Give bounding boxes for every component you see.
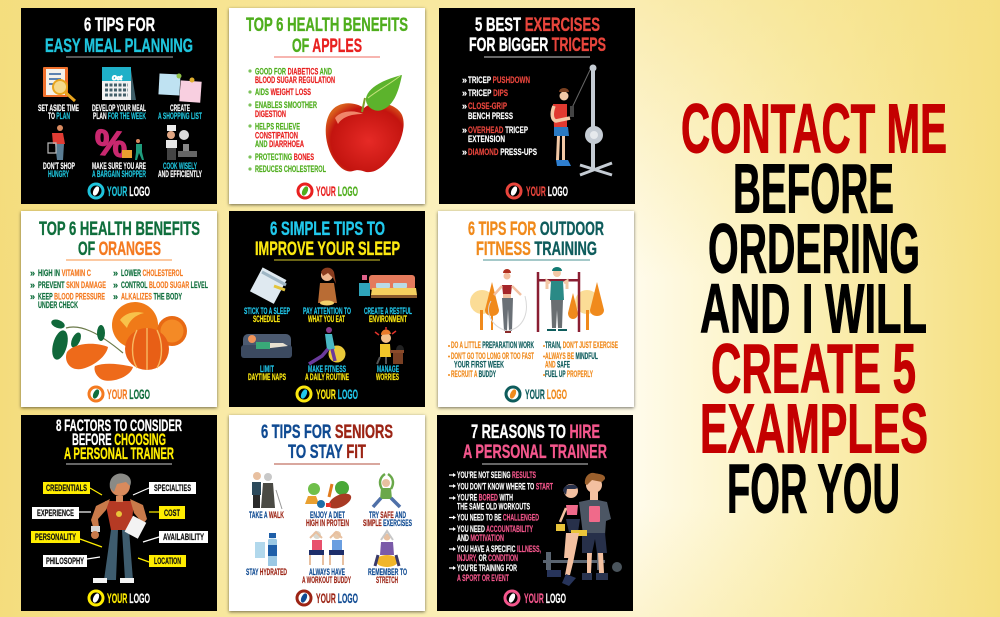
exercise list: » <box>462 125 467 135</box>
tips list: RECRUIT A BUDDY <box>451 369 496 379</box>
label: pay attention: WHAT YOU EAT <box>308 314 345 324</box>
call to action text <box>681 90 947 528</box>
label: develop meal plan <box>92 103 146 121</box>
label: specialties <box>133 482 196 495</box>
label: availability: AVAILABILITY <box>163 532 204 542</box>
illustration: trees <box>470 282 604 330</box>
label: stick to a sleep schedule: STICK TO A SLEEP <box>244 306 290 316</box>
reasons list: THE SAME OLD WORKOUTS <box>457 502 530 512</box>
label: take a walk: TAKE A WALK <box>249 510 284 520</box>
reasons list: YOU'RE BORED WITH <box>457 492 513 502</box>
heading: factors: 8 FACTORS TO CONSIDER <box>56 417 182 435</box>
panel: 6 simple tips to improve your sleep <box>229 211 425 407</box>
logo <box>89 387 150 402</box>
label: restful environment <box>364 306 412 324</box>
logo <box>89 591 150 606</box>
logo <box>507 184 568 199</box>
label: cook wisely: AND EFFICIENTLY <box>158 169 202 179</box>
icon: cable machine with man <box>552 64 612 175</box>
logo: YOUR LOGO <box>316 591 358 606</box>
exercise list: TRICEP DIPS <box>468 88 508 98</box>
exercise list: OVERHEAD TRICEP <box>468 125 528 135</box>
benefits list: » <box>30 292 35 302</box>
label: shopping list <box>158 103 202 121</box>
icon: senior couple walking <box>252 472 282 509</box>
logo: YOUR LOGO <box>526 184 568 199</box>
benefits list: » <box>113 268 118 278</box>
label: set aside time <box>38 103 79 121</box>
label: don't shop hungry <box>43 161 75 179</box>
label: limit daytime naps <box>248 364 286 382</box>
tips list: YOUR FIRST WEEK <box>454 360 504 370</box>
panel: top 6 health benefits of oranges <box>21 211 217 407</box>
benefits list: ALKALIZES THE BODY <box>121 292 182 302</box>
label: restful environment: ENVIRONMENT <box>369 314 407 324</box>
tips list: AND SAFE <box>545 360 570 370</box>
reasons list <box>449 470 553 583</box>
label: manage worries: MANAGE <box>377 364 399 374</box>
heading: apples: OF APPLES <box>292 35 362 57</box>
icon: water and bottle <box>255 533 277 566</box>
label: stay hydrated: STAY HYDRATED <box>246 567 287 577</box>
logo <box>297 387 358 402</box>
heading: easy meal planning: 6 TIPS FOR <box>84 14 155 36</box>
label: don't shop hungry: DON'T SHOP <box>43 161 75 171</box>
label: make fitness routine <box>305 364 349 382</box>
benefits list: HELPS RELIEVE <box>255 122 300 132</box>
exercise list: BENCH PRESS <box>468 111 513 121</box>
icon: oranges and leaves <box>49 302 187 381</box>
icon: napping on sofa <box>241 334 292 358</box>
label: remember to stretch: STRETCH <box>376 575 398 585</box>
label: enjoy a diet: ENJOY A DIET <box>310 510 345 520</box>
label: develop meal plan: PLAN FOR THE WEEK <box>93 111 146 121</box>
tips list: TRAIN, DON'T JUST EXERCISE <box>545 340 618 350</box>
benefits list: LOWER CHOLESTEROL <box>121 268 183 278</box>
exercise list: TRICEP PUSHDOWN <box>468 75 530 85</box>
label: restful environment: CREATE A RESTFUL <box>364 306 412 316</box>
label: develop meal plan: DEVELOP YOUR MEAL <box>92 103 146 113</box>
label: safe exercises <box>363 510 412 528</box>
panel: top 6 health benefits of apples <box>229 8 425 204</box>
benefits list: CONTROL BLOOD SUGAR LEVEL <box>121 280 208 290</box>
label: location: LOCATION <box>154 556 181 566</box>
logo <box>298 184 358 199</box>
tips list: DO A LITTLE PREPARATION WORK <box>451 340 534 350</box>
heading: reasons: 7 REASONS TO HIRE <box>471 421 600 443</box>
heading: reasons <box>463 421 607 463</box>
logo <box>297 591 358 606</box>
label: bargain shopper: MAKE SURE YOU ARE <box>92 161 146 171</box>
heading: triceps <box>469 14 606 56</box>
label: credentials <box>43 482 102 495</box>
reasons list: INJURY, OR CONDITION <box>457 553 518 563</box>
panel: 8 factors to consider <box>21 415 217 611</box>
tips list <box>448 340 618 379</box>
icon: stretching on ball <box>375 531 399 567</box>
label: don't shop hungry: HUNGRY <box>48 169 69 179</box>
icon: tilted calendar <box>250 267 286 304</box>
label: philosophy: PHILOSOPHY <box>46 556 84 566</box>
logo: YOUR LOGO <box>525 387 567 402</box>
reasons list: YOU'RE TRAINING FOR <box>457 563 517 573</box>
label: set aside time: TO PLAN <box>48 111 70 121</box>
benefits list: PREVENT SKIN DAMAGE <box>38 280 106 290</box>
logo <box>505 591 566 606</box>
logo <box>89 184 150 199</box>
tips list: DON'T GO TOO LONG OR TOO FAST <box>451 351 534 361</box>
label: limit daytime naps: LIMIT <box>260 364 274 374</box>
icon: apple <box>326 75 404 172</box>
heading: factors: A PERSONAL TRAINER <box>64 445 174 463</box>
logo: YOUR LOGO <box>107 387 150 402</box>
heading: sleep <box>255 218 400 260</box>
heading: oranges <box>39 218 200 260</box>
exercise list: » <box>462 88 467 98</box>
panel: 6 tips for easy meal planning <box>21 8 217 204</box>
panel: 7 reasons to hire a personal trainer <box>437 415 633 611</box>
icon: woman with fitness ball <box>309 327 346 364</box>
reasons list: A SPORT OR EVENT <box>457 573 509 583</box>
reasons list: YOU'RE NOT SEEING RESULTS <box>457 470 536 480</box>
exercise list: » <box>462 75 467 85</box>
heading: outdoor fitness: 6 TIPS FOR OUTDOOR <box>468 218 604 240</box>
label: cost: COST <box>164 508 180 518</box>
label: experience: EXPERIENCE <box>37 508 74 518</box>
panel: 6 tips for outdoor fitness training <box>438 211 634 407</box>
panel: 6 tips for seniors to stay fit <box>229 415 425 611</box>
benefits list: ENABLES SMOOTHER <box>255 100 317 110</box>
exercise list: » <box>462 147 467 157</box>
tips list: ALWAYS BE MINDFUL <box>545 351 598 361</box>
label: workout buddy: ALWAYS HAVE <box>309 567 345 577</box>
label: manage worries: WORRIES <box>376 372 399 382</box>
reasons list: YOU DON'T KNOW WHERE TO START <box>457 482 553 492</box>
heading: sleep: IMPROVE YOUR SLEEP <box>255 238 400 260</box>
icon: bed <box>359 275 417 298</box>
heading: factors: BEFORE CHOOSING <box>72 431 166 449</box>
label: enjoy a diet <box>306 510 349 528</box>
label: remember to stretch: REMEMBER TO <box>368 567 407 577</box>
heading: easy meal planning <box>45 14 193 57</box>
benefits list: UNDER CHECK <box>38 300 78 310</box>
tips list: FUEL UP PROPERLY <box>545 369 593 379</box>
logo <box>506 387 567 402</box>
heading: sleep: 6 SIMPLE TIPS TO <box>270 218 385 240</box>
label: enjoy a diet: HIGH IN PROTEIN <box>306 518 349 528</box>
exercise list: DIAMOND PRESS-UPS <box>468 147 537 157</box>
icon: sticky notes <box>158 73 202 103</box>
exercise list: EXTENSION <box>468 134 505 144</box>
icon: clipboard and magnifier <box>43 67 75 101</box>
heading: outdoor fitness: FITNESS TRAINING <box>476 238 597 260</box>
icon: worried man at desk <box>375 327 404 364</box>
label: manage worries <box>376 364 399 382</box>
label: cook wisely: COOK WISELY <box>163 161 197 171</box>
illustration: trainer <box>91 474 147 583</box>
heading: apples <box>246 14 408 57</box>
benefits list: DIGESTION <box>255 109 286 119</box>
benefits list: AND DIARRHOEA <box>255 139 304 149</box>
label: pay attention <box>303 306 351 324</box>
panel: 5 best exercises for bigger triceps <box>439 8 635 204</box>
benefits list: » <box>30 268 35 278</box>
icon: healthy food <box>305 481 353 512</box>
reasons list: AND MOTIVATION <box>457 533 504 543</box>
icon: percent and shopper <box>95 121 144 165</box>
label: workout buddy <box>302 567 351 585</box>
heading: seniors: 6 TIPS FOR SENIORS <box>261 421 393 443</box>
benefits list: KEEP BLOOD PRESSURE <box>38 292 105 302</box>
heading: factors <box>56 417 182 463</box>
heading: triceps: FOR BIGGER TRICEPS <box>469 34 606 56</box>
logo: YOUR LOGO <box>107 591 150 606</box>
label: specialties: SPECIALTIES <box>154 483 191 493</box>
icon: yoga senior <box>373 474 400 507</box>
exercise list <box>462 75 537 157</box>
benefits list: AIDS WEIGHT LOSS <box>255 87 311 97</box>
benefits list: CONSTIPATION <box>255 130 298 140</box>
label: cook wisely <box>158 161 202 179</box>
label: set aside time: SET ASIDE TIME <box>38 103 79 113</box>
icon: calendar: Oct <box>112 76 123 82</box>
heading: easy meal planning: EASY MEAL PLANNING <box>45 35 193 57</box>
illustration: man on pull-up bar <box>538 267 579 332</box>
logo: YOUR LOGO <box>316 184 358 199</box>
label: stick to a sleep schedule: SCHEDULE <box>253 314 280 324</box>
benefits list: » <box>113 292 118 302</box>
benefits list: BLOOD SUGAR REGULATION <box>255 75 335 85</box>
logo: YOUR LOGO <box>524 591 566 606</box>
icon: chef cooking <box>166 125 197 160</box>
icon: percent and shopper: % <box>95 121 127 165</box>
illustration: woman jumping rope <box>489 269 526 333</box>
heading: oranges: OF ORANGES <box>78 238 161 260</box>
benefits list: PROTECTING BONES <box>255 152 314 162</box>
icon: shopper <box>48 125 65 160</box>
heading: seniors: TO STAY FIT <box>288 441 366 463</box>
label: bargain shopper: A BARGAIN SHOPPER <box>92 169 146 179</box>
label: cost <box>149 506 185 519</box>
heading: reasons: A PERSONAL TRAINER <box>463 441 607 463</box>
label: stick to a sleep schedule <box>244 306 290 324</box>
benefits list <box>248 66 335 174</box>
logo: YOUR LOGO <box>316 387 358 402</box>
label: make fitness routine: MAKE FITNESS <box>308 364 346 374</box>
label: bargain shopper <box>92 161 146 179</box>
heading: seniors <box>261 421 393 463</box>
exercise list: » <box>462 101 467 111</box>
label: shopping list: A SHOPPING LIST <box>158 111 202 121</box>
label: location <box>138 555 186 567</box>
label: credentials: CREDENTIALS <box>46 483 87 493</box>
heading: apples: TOP 6 HEALTH BENEFITS <box>246 14 408 36</box>
benefits list: HIGH IN VITAMIN C <box>38 268 91 278</box>
benefits list: » <box>30 280 35 290</box>
icon: workout buddies <box>309 531 344 565</box>
icon: woman eating <box>318 268 337 306</box>
label: personality: PERSONALITY <box>35 532 76 542</box>
label: personality <box>31 531 102 547</box>
logo: YOUR LOGO <box>107 184 150 199</box>
icon: calendar <box>102 67 136 100</box>
label: workout buddy: A WORKOUT BUDDY <box>302 575 351 585</box>
label: make fitness routine: A DAILY ROUTINE <box>305 372 349 382</box>
benefits list: GOOD FOR DIABETICS AND <box>255 66 332 76</box>
reasons list: YOU HAVE A SPECIFIC ILLNESS, <box>457 544 541 554</box>
benefits list <box>30 268 208 310</box>
label: safe exercises: TRY SAFE AND <box>369 510 406 520</box>
illustration: personal trainer and client <box>543 473 622 586</box>
label: pay attention: PAY ATTENTION TO <box>303 306 351 316</box>
label: remember to stretch <box>368 567 407 585</box>
label: limit daytime naps: DAYTIME NAPS <box>248 372 286 382</box>
label: safe exercises: SIMPLE EXERCISES <box>363 518 412 528</box>
benefits list: REDUCES CHOLESTEROL <box>255 164 326 174</box>
heading: triceps: 5 BEST EXERCISES <box>475 14 600 36</box>
heading: outdoor fitness <box>468 218 604 260</box>
heading: oranges: TOP 6 HEALTH BENEFITS <box>39 218 200 240</box>
label: availability <box>143 531 208 543</box>
reasons list: YOU NEED TO BE CHALLENGED <box>457 512 539 522</box>
reasons list: YOU NEED ACCOUNTABILITY <box>457 524 533 534</box>
exercise list: CLOSE-GRIP <box>468 101 507 111</box>
label: shopping list: CREATE <box>170 103 190 113</box>
benefits list: » <box>113 280 118 290</box>
